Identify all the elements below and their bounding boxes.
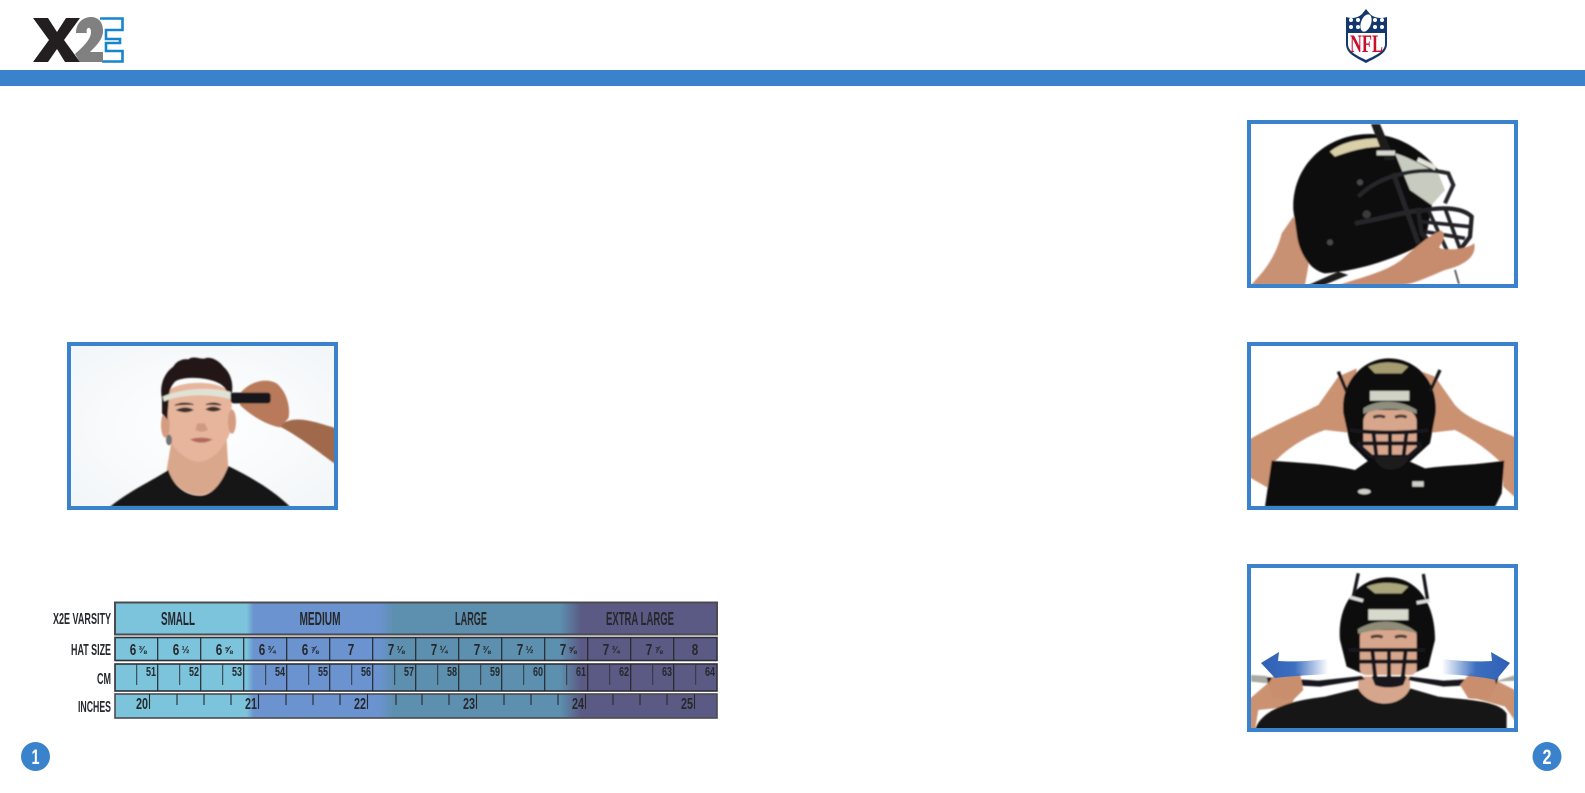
row labels bbox=[53, 611, 111, 716]
row: hat size: 7 bbox=[388, 642, 394, 659]
row: helmet size: LARGE bbox=[455, 609, 487, 629]
photo: head measurement bbox=[67, 342, 338, 510]
row: hat size: ⅜ bbox=[482, 645, 491, 656]
photo: pulling straps with arrows bbox=[1247, 564, 1522, 732]
row: helmet size bbox=[115, 602, 717, 634]
page number 1: 1 bbox=[32, 746, 40, 769]
header bar bbox=[0, 70, 1585, 86]
row labels: X2E VARSITY bbox=[53, 611, 111, 628]
row: hat size: 7 bbox=[431, 642, 437, 659]
row: centimetres: 52 bbox=[189, 664, 199, 679]
row: hat size: ⅞ bbox=[310, 645, 319, 656]
row: hat size: ⅝ bbox=[224, 645, 233, 656]
row labels: HAT SIZE bbox=[71, 642, 111, 659]
row: centimetres: 57 bbox=[404, 664, 414, 679]
row: inches: 20 bbox=[136, 696, 148, 713]
row: centimetres: 63 bbox=[662, 664, 672, 679]
row: hat size: ⅞ bbox=[654, 645, 663, 656]
row: hat size: ¾ bbox=[612, 645, 620, 656]
row: hat size: 8 bbox=[692, 642, 698, 659]
row: centimetres: 54 bbox=[275, 664, 286, 679]
row: inches: 23 bbox=[463, 696, 475, 713]
row: hat size: ½ bbox=[182, 645, 190, 656]
row: inches: 22 bbox=[354, 696, 366, 713]
row: centimetres: 61 bbox=[576, 664, 586, 679]
row labels: CM bbox=[97, 671, 111, 688]
row: hat size: 7 bbox=[560, 642, 566, 659]
size chart bbox=[53, 602, 717, 718]
row: hat size: ⅜ bbox=[138, 645, 147, 656]
X2E logo bbox=[33, 17, 122, 62]
row: hat size: 7 bbox=[646, 642, 652, 659]
row: centimetres: 60 bbox=[533, 664, 543, 679]
row: inches: 25 bbox=[681, 696, 693, 713]
row: hat size: ¾ bbox=[268, 645, 276, 656]
arrow: left pull bbox=[1261, 652, 1328, 678]
page number 2: 2 bbox=[1542, 746, 1552, 769]
row: centimetres bbox=[115, 664, 717, 691]
row: hat size: 6 bbox=[130, 642, 136, 659]
row: hat size: 6 bbox=[173, 642, 179, 659]
photo: helmet being opened bbox=[1247, 120, 1518, 288]
NFL shield logo: NFL bbox=[1350, 31, 1383, 58]
row: centimetres: 53 bbox=[232, 664, 242, 679]
arrow: right pull bbox=[1442, 652, 1510, 680]
row: hat size: 7 bbox=[474, 642, 480, 659]
row: hat size: 6 bbox=[302, 642, 308, 659]
row: helmet size: MEDIUM bbox=[300, 609, 340, 629]
row: hat size: ¼ bbox=[440, 645, 448, 656]
row: helmet size: EXTRA LARGE bbox=[606, 609, 674, 629]
row: hat size: ⅛ bbox=[396, 645, 405, 656]
row: hat size: ½ bbox=[526, 645, 534, 656]
row: centimetres: 56 bbox=[361, 664, 371, 679]
photo: player putting on helmet bbox=[1247, 342, 1522, 510]
row: centimetres: 51 bbox=[146, 664, 156, 679]
row: centimetres: 59 bbox=[490, 664, 500, 679]
page number 2 bbox=[1532, 742, 1562, 771]
row labels: INCHES bbox=[78, 699, 111, 716]
NFL shield logo bbox=[1346, 9, 1387, 63]
row: centimetres: 64 bbox=[705, 664, 716, 679]
row: hat size bbox=[115, 637, 717, 661]
row: inches bbox=[115, 694, 717, 718]
row: hat size: 7 bbox=[517, 642, 523, 659]
row: hat size: ⅝ bbox=[568, 645, 577, 656]
row: hat size: 6 bbox=[216, 642, 222, 659]
row: hat size: 6 bbox=[259, 642, 265, 659]
row: centimetres: 62 bbox=[619, 664, 629, 679]
row: hat size: 7 bbox=[603, 642, 609, 659]
page number 1 bbox=[21, 742, 50, 771]
row: hat size: 7 bbox=[348, 642, 354, 659]
row: centimetres: 55 bbox=[318, 664, 328, 679]
row: helmet size: SMALL bbox=[161, 609, 195, 629]
row: inches: 24 bbox=[572, 696, 584, 713]
row: inches: 21 bbox=[245, 696, 257, 713]
row: centimetres: 58 bbox=[447, 664, 457, 679]
